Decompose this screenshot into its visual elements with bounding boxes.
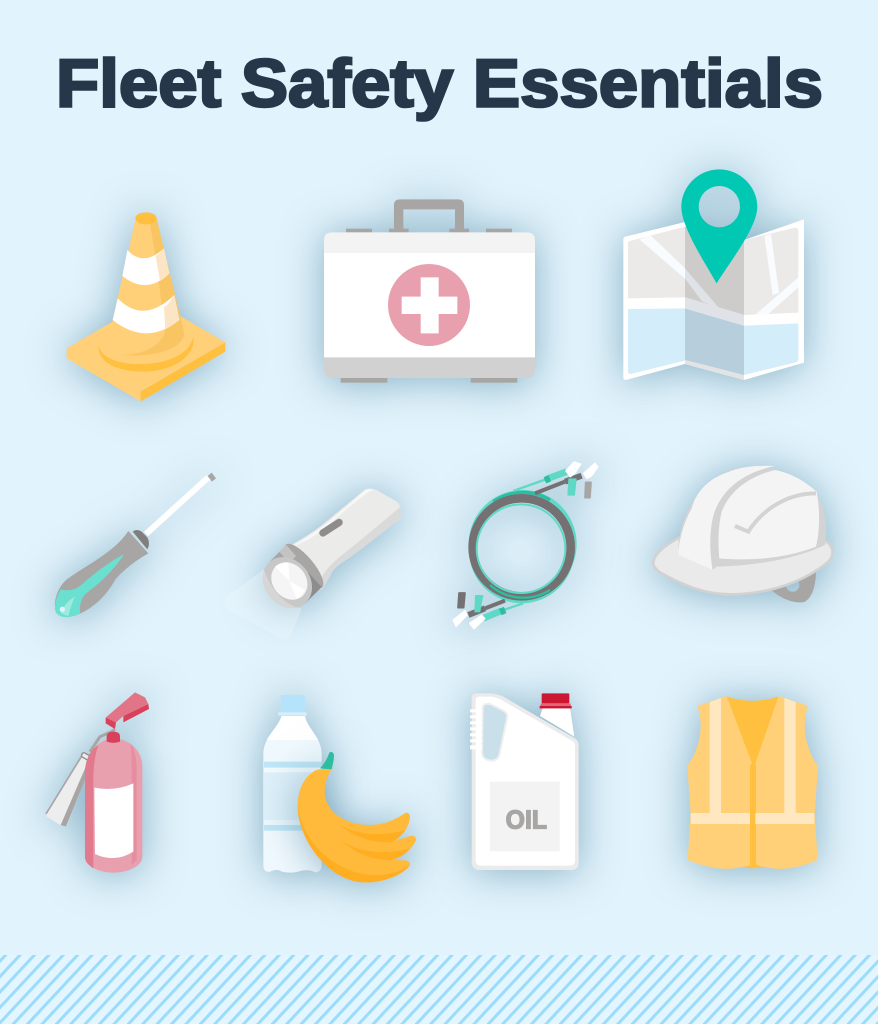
icon: jumper cables xyxy=(453,462,598,629)
flashlight lens xyxy=(264,555,315,607)
extinguisher hose xyxy=(90,729,115,752)
bottle label bands xyxy=(264,762,322,831)
medical cross badge xyxy=(388,264,470,346)
screwdriver grip accent xyxy=(55,554,124,617)
icon: fire extinguisher xyxy=(46,692,149,873)
striped footer band xyxy=(0,955,878,1024)
icon: folded map with location pin xyxy=(623,169,804,380)
vest right panel xyxy=(755,696,818,869)
icon: hard hat xyxy=(653,466,833,602)
vest inner collar and zipper xyxy=(727,697,778,868)
jug handle opening xyxy=(482,704,507,761)
map water panels xyxy=(628,308,798,380)
map roads xyxy=(639,234,798,326)
banana stem xyxy=(320,752,334,769)
top banana shade xyxy=(340,825,405,842)
banana bunch xyxy=(298,769,416,882)
vest reflective stripes xyxy=(691,698,814,824)
icon: bananas xyxy=(298,752,416,882)
hat brim xyxy=(653,537,833,594)
icon: water bottle xyxy=(263,695,322,873)
jug outline xyxy=(472,693,579,870)
extinguisher label xyxy=(94,783,133,858)
vest left panel xyxy=(687,696,753,869)
extinguisher cylinder xyxy=(85,738,142,873)
map sheet xyxy=(623,219,804,380)
bottom clamps xyxy=(453,593,523,629)
jug label xyxy=(490,782,560,851)
screwdriver collar xyxy=(133,530,149,549)
title: Fleet Safety Essentials xyxy=(56,46,823,122)
hat right panel xyxy=(718,470,819,559)
flashlight light beam xyxy=(224,569,302,639)
cone body xyxy=(113,212,184,356)
top clamps xyxy=(513,462,598,498)
flashlight body xyxy=(285,488,401,590)
vest center zipper xyxy=(750,763,756,863)
screwdriver handle xyxy=(55,531,148,617)
hat left panel xyxy=(678,466,775,570)
middle banana shade xyxy=(340,840,410,860)
icon: safety vest xyxy=(687,696,818,869)
jug cap xyxy=(540,693,572,708)
icon: oil jug xyxy=(470,693,579,870)
screwdriver tip xyxy=(208,473,216,482)
location pin xyxy=(681,169,757,283)
extinguisher nozzle xyxy=(46,752,93,827)
bottom banana edge xyxy=(298,807,410,882)
flashlight head ring xyxy=(252,539,329,618)
extinguisher valve xyxy=(107,732,120,743)
kit case xyxy=(324,232,535,378)
icon: first aid kit xyxy=(324,199,535,383)
jug neck xyxy=(540,708,574,737)
jug grip ridges xyxy=(470,709,482,749)
cone base xyxy=(67,299,225,401)
bottle cap xyxy=(278,695,307,716)
icon: screwdriver xyxy=(55,473,216,617)
screwdriver shaft xyxy=(146,477,208,534)
chin strap xyxy=(768,570,816,602)
jug label: OIL xyxy=(506,805,547,835)
map land panels xyxy=(628,227,798,315)
kit handle and latches xyxy=(341,199,517,383)
hat ridge xyxy=(735,493,816,532)
icon: traffic cone xyxy=(67,212,225,401)
extinguisher lever xyxy=(106,692,149,729)
cable coil xyxy=(471,492,574,601)
jug body xyxy=(476,697,575,866)
bottle shoulder xyxy=(267,716,318,740)
icon: flashlight xyxy=(252,488,401,618)
hat dome shade xyxy=(678,467,826,570)
bottle body xyxy=(263,716,322,873)
flashlight switch xyxy=(318,517,344,538)
